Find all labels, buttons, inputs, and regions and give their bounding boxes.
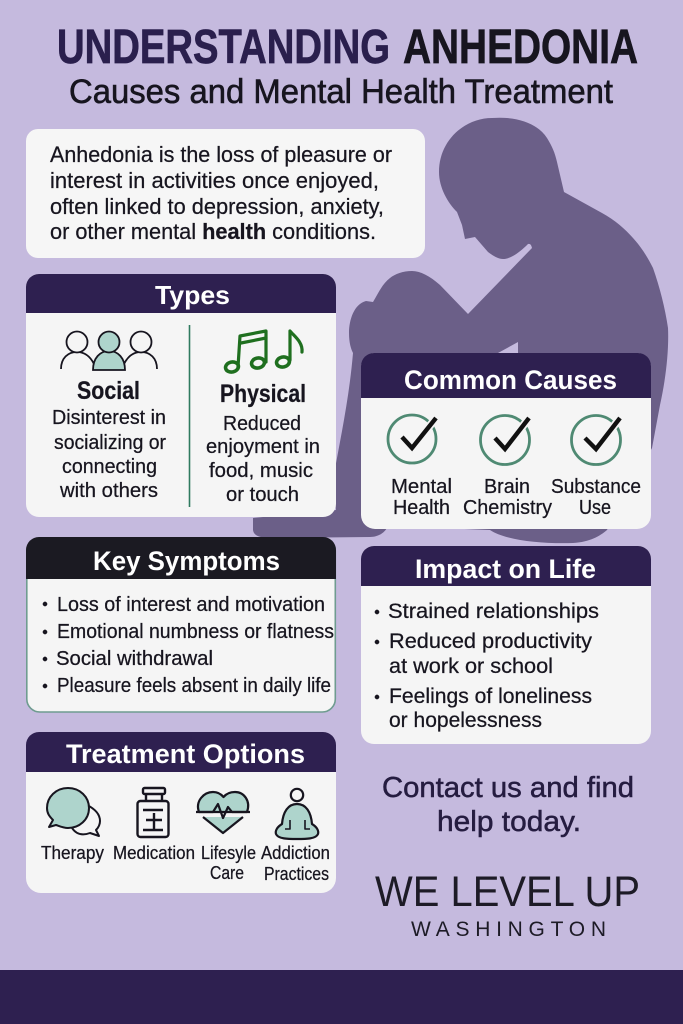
physical heading: Physical: [220, 380, 306, 408]
cause labels: Mental: [391, 476, 452, 498]
symptoms list: Social withdrawal: [56, 648, 213, 670]
cause labels: [391, 476, 641, 519]
impact list: or hopelessness: [389, 709, 542, 732]
symptoms list: Pleasure feels absent in daily life: [57, 675, 331, 697]
panel: definition: Anhedonia is the loss of pleasure or: [50, 142, 392, 167]
cause labels: Chemistry: [463, 497, 552, 519]
social description: [52, 407, 166, 502]
treatment labels: Care: [210, 863, 244, 883]
panel: common causes: [361, 353, 651, 529]
icon: meditating person: [276, 789, 318, 839]
panel: definition: often linked to depression, anxiety,: [50, 194, 384, 219]
social description: socializing or: [54, 432, 166, 454]
icon: music notes: [225, 331, 302, 373]
logo: [375, 868, 640, 941]
treatment labels: Addiction: [261, 843, 330, 863]
key symptoms heading: Key Symptoms: [93, 546, 280, 576]
treatment labels: [41, 843, 330, 884]
icon: speech bubbles: [47, 788, 100, 836]
symptoms list: Loss of interest and motivation: [57, 594, 325, 616]
impact list: Reduced productivity: [389, 630, 593, 653]
panel: treatment options: [26, 732, 336, 893]
call to action: help today.: [437, 806, 581, 838]
impact list: [375, 600, 599, 732]
call to action: [382, 772, 634, 838]
cause labels: Use: [579, 497, 611, 519]
icon: three people: [61, 332, 157, 370]
icon: medication jar: [138, 788, 168, 837]
treatment labels: Medication: [113, 843, 195, 863]
impact heading: Impact on Life: [415, 554, 596, 584]
social description: with others: [59, 480, 158, 502]
types heading: Types: [155, 280, 230, 310]
social heading: Social: [77, 377, 140, 405]
subtitle: Causes and Mental Health Treatment: [69, 73, 614, 111]
cause labels: Brain: [484, 476, 530, 498]
symptoms list: [43, 594, 334, 697]
panel: types: [26, 274, 336, 517]
impact list: Strained relationships: [388, 600, 599, 623]
impact list: at work or school: [389, 655, 553, 678]
panel: definition: [26, 129, 425, 258]
icon: check mental health: [388, 415, 436, 463]
panel: impact on life: [361, 546, 651, 744]
panel: definition: or other mental health conditions.: [50, 219, 376, 244]
title: UNDERSTANDING: [57, 21, 390, 74]
physical description: or touch: [226, 484, 299, 506]
cause labels: Substance: [551, 476, 641, 498]
treatment labels: Therapy: [41, 843, 104, 863]
call to action: Contact us and find: [382, 772, 634, 804]
physical description: enjoyment in: [206, 436, 320, 458]
logo: WASHINGTON: [411, 918, 606, 941]
treatment labels: Lifesyle: [201, 843, 256, 863]
logo: WE LEVEL UP: [375, 868, 640, 916]
symptoms list: Emotional numbness or flatness: [57, 621, 334, 643]
cause labels: Health: [393, 497, 450, 519]
social description: connecting: [62, 456, 157, 478]
impact list: Feelings of loneliness: [389, 685, 592, 708]
treatment heading: Treatment Options: [66, 739, 305, 769]
icon: check substance use: [572, 416, 620, 464]
physical description: [206, 413, 320, 506]
panel: definition: interest in activities once enjoyed,: [50, 168, 379, 193]
icon: heart with pulse: [196, 792, 250, 833]
treatment labels: Practices: [264, 864, 329, 884]
physical description: food, music: [209, 460, 313, 482]
social description: Disinterest in: [52, 407, 166, 429]
icon: check brain chemistry: [480, 416, 530, 464]
common causes heading: Common Causes: [404, 365, 617, 395]
panel: key symptoms: [26, 537, 336, 712]
silhouette of seated person: [253, 118, 668, 543]
footer band: [0, 970, 683, 1024]
physical description: Reduced: [223, 413, 301, 435]
